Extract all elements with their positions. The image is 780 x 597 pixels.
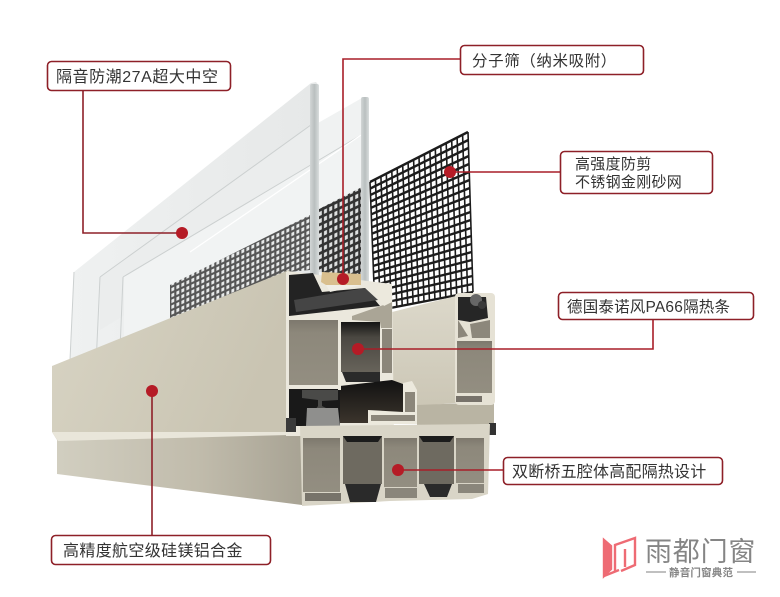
label: double bridge five chambers: 双断桥五腔体高配隔热设计	[512, 463, 706, 481]
aluminium cross-section with thermal chambers	[286, 271, 403, 436]
label: molecular sieve	[460, 46, 644, 74]
label: aviation alloy	[52, 536, 270, 564]
logo text: 静音门窗典范	[669, 566, 733, 579]
label: PA66 thermal strip	[558, 292, 754, 320]
label: hollow glass: 隔音防潮27A超大中空	[56, 68, 219, 86]
bottom thermal chambers	[303, 438, 340, 492]
mid dark channel	[288, 389, 340, 426]
label: stainless steel mesh: 高强度防剪	[575, 156, 652, 173]
rear perforated security mesh	[370, 132, 473, 311]
front pane	[70, 82, 319, 370]
mesh seen through glass	[170, 215, 310, 318]
logo icon	[604, 538, 635, 576]
top channel	[289, 273, 380, 316]
label: aviation alloy: 高精度航空级硅镁铝合金	[63, 542, 243, 560]
label: hollow glass	[48, 62, 230, 90]
right rear profile	[392, 293, 496, 435]
callout lines and dots	[83, 59, 653, 535]
label: double bridge five chambers	[504, 458, 722, 484]
label: stainless steel mesh: 不锈钢金刚砂网	[575, 174, 682, 191]
front aluminium face	[52, 270, 302, 505]
rear pane	[200, 98, 368, 340]
glass bead with desiccant	[321, 272, 361, 285]
label: PA66 thermal strip: 德国泰诺风PA66隔热条	[567, 298, 730, 316]
logo text: 雨都门窗	[645, 537, 756, 567]
glass edge strips	[310, 84, 319, 298]
label: stainless steel mesh	[560, 152, 712, 194]
double glazing panes	[70, 82, 369, 370]
insulating bar chamber	[341, 322, 380, 372]
label: molecular sieve: 分子筛（纳米吸附）	[472, 52, 617, 70]
lower sash profile	[286, 381, 490, 506]
large chamber	[289, 320, 338, 385]
